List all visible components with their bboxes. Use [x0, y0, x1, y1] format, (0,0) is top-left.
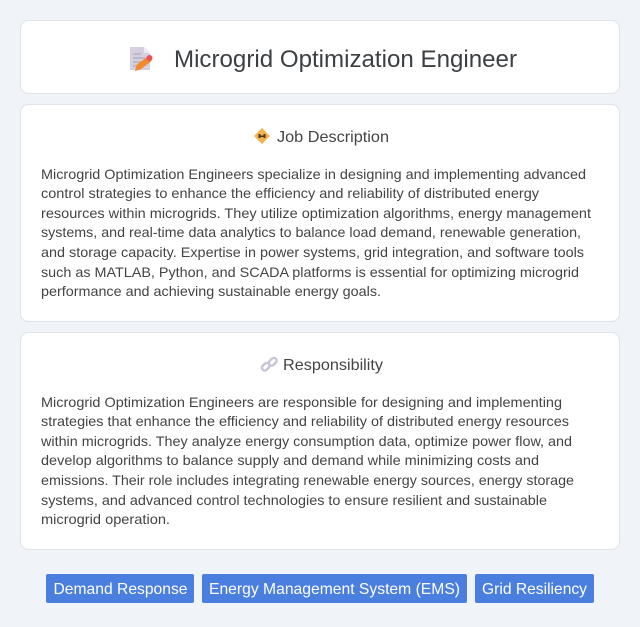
text block: job description: systems, and real-time data analytics to balance load demand, renewable generation, [41, 224, 581, 240]
text block: responsibility [40, 394, 574, 527]
icon: link [261, 357, 278, 372]
text block: responsibility: emissions. Their role includes integrating renewable energy sources, energy storage [41, 472, 574, 488]
tag: demand response: Demand Response [54, 581, 188, 598]
tag: energy management system [202, 574, 467, 603]
panel: title [20, 20, 620, 94]
text block: responsibility: develop algorithms to balance supply and demand while minimizing costs and [41, 452, 539, 468]
text block: job description: such as MATLAB, Python, and SCADA platforms is essential for optimizing microgrid [41, 264, 579, 280]
icon: document with pencil [130, 47, 152, 71]
text block: responsibility: Microgrid Optimization Engineers are responsible for designing and implementing [41, 394, 562, 410]
tags row [46, 574, 594, 603]
tag: energy management system: Energy Management System (EMS) [209, 581, 460, 598]
text block: job description: resources within microgrids. They utilize optimization algorithms, energy management [41, 205, 591, 221]
tag: demand response [46, 574, 194, 603]
icon: diamond sign [254, 128, 270, 144]
panel: responsibility [20, 332, 620, 550]
text block: responsibility: systems, and advanced control technologies to ensure resilient and sustainable [41, 492, 547, 508]
text block: job description: Microgrid Optimization Engineers specialize in designing and implementing advanced [41, 166, 586, 182]
tag: grid resiliency [475, 574, 594, 603]
text block: job description: control strategies to enhance the efficiency and reliability of distributed energy [41, 185, 539, 201]
text block: job description: performance and achieving sustainable energy goals. [41, 283, 381, 299]
text block: job description: and storage capacity. Expertise in power systems, grid integration, and software tools [41, 244, 584, 260]
panel: job description [20, 104, 620, 322]
tag: grid resiliency: Grid Resiliency [482, 581, 587, 598]
text block: responsibility: strategies that enhance the efficiency and reliability of distributed energy resources [41, 413, 569, 429]
text block: responsibility: within microgrids. They analyze energy consumption data, optimize power flow, and [40, 433, 572, 449]
text block: responsibility: microgrid operation. [41, 511, 170, 527]
heading: responsibility: Responsibility [283, 357, 383, 374]
title text: Microgrid Optimization Engineer [174, 46, 517, 73]
heading: job description: Job Description [277, 129, 389, 146]
text block: job description [41, 166, 591, 299]
